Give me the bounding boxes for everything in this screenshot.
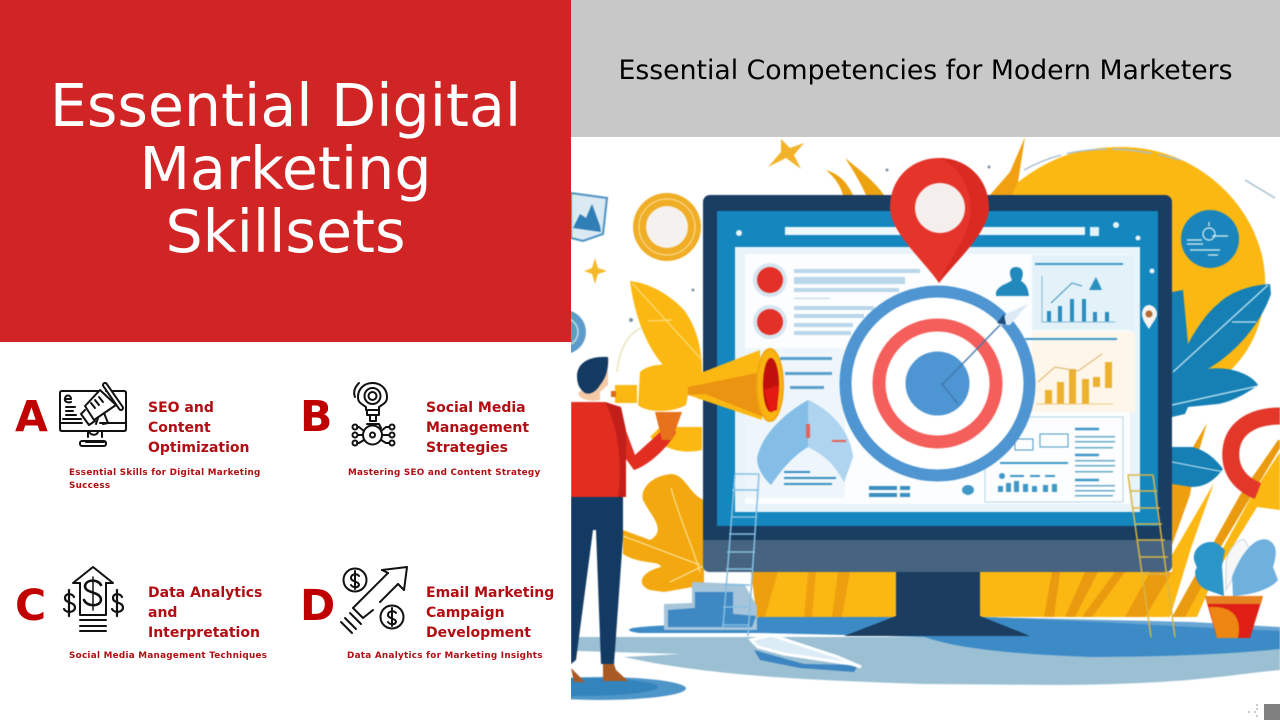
screen: lower dashboard panels bbox=[962, 417, 1123, 502]
screen: avatar and bar chart bbox=[996, 255, 1135, 330]
card C bbox=[15, 566, 267, 661]
screen: list with red bullets bbox=[745, 263, 920, 498]
icon: dollar house arrow bbox=[62, 566, 124, 632]
sprinkle of dots bbox=[629, 166, 990, 322]
caption A: Success bbox=[69, 481, 110, 491]
title: Marketing bbox=[139, 135, 432, 203]
title bbox=[50, 72, 521, 266]
decorative stars and badges bbox=[571, 138, 804, 354]
red ring arc bbox=[1231, 416, 1280, 510]
yellow leaf bbox=[617, 281, 702, 452]
letter A: A bbox=[15, 393, 48, 442]
corner grey square with dots bbox=[1248, 704, 1280, 720]
yellow base band bbox=[751, 423, 1280, 617]
card B bbox=[300, 382, 541, 478]
pencil bbox=[751, 635, 861, 672]
subtitle: Essential Competencies for Modern Marketers bbox=[619, 55, 1232, 86]
heading D bbox=[426, 585, 554, 641]
blue stairs bbox=[664, 582, 757, 630]
yellow sun backdrop bbox=[826, 137, 1275, 390]
card D bbox=[300, 566, 554, 661]
title: Essential Digital bbox=[50, 72, 521, 140]
icon: monitor with megaphone bbox=[59, 382, 127, 447]
potted plant bbox=[1194, 539, 1278, 638]
heading C: and bbox=[148, 605, 177, 621]
heading A: SEO and bbox=[148, 400, 214, 416]
person bbox=[571, 357, 676, 682]
ground bbox=[571, 617, 1280, 685]
blue ladder bbox=[722, 474, 759, 636]
heading C: Interpretation bbox=[148, 625, 260, 641]
caption C: Social Media Management Techniques bbox=[69, 651, 267, 661]
panel: title background bbox=[0, 0, 571, 342]
title: Skillsets bbox=[165, 198, 406, 266]
screen: pie shape and text bbox=[757, 400, 910, 497]
heading B: Management bbox=[426, 420, 529, 436]
heading B: Social Media bbox=[426, 400, 526, 416]
caption A bbox=[69, 468, 261, 491]
yellow ladder bbox=[1128, 475, 1175, 637]
megaphone bbox=[611, 349, 783, 440]
heading A: Content bbox=[148, 420, 211, 436]
panel: subtitle band bbox=[571, 0, 1280, 137]
caption D: Data Analytics for Marketing Insights bbox=[347, 651, 543, 661]
heading A: Optimization bbox=[148, 440, 249, 456]
heading B bbox=[426, 400, 529, 456]
shadow under person bbox=[571, 676, 687, 701]
orange leaf bbox=[623, 474, 704, 592]
icon: growth arrow with coins bbox=[340, 566, 408, 634]
heading A bbox=[148, 400, 249, 456]
caption A: Essential Skills for Digital Marketing bbox=[69, 468, 261, 478]
card A bbox=[15, 382, 261, 491]
target with arrow bbox=[846, 292, 1030, 476]
heading C: Data Analytics bbox=[148, 585, 262, 601]
small map pin and sun badge bbox=[1142, 210, 1239, 329]
screen: orange bar chart bbox=[1025, 332, 1135, 412]
illustration: marketer with megaphone and monitor bbox=[571, 137, 1280, 701]
letter B: B bbox=[300, 393, 332, 442]
blue leaves bbox=[1172, 284, 1271, 487]
heading D: Campaign bbox=[426, 605, 505, 621]
heading B: Strategies bbox=[426, 440, 508, 456]
location pin bbox=[890, 158, 989, 283]
heading C bbox=[148, 585, 262, 641]
icon: lightbulb with network bbox=[352, 382, 396, 446]
monitor bbox=[703, 195, 1172, 636]
letter D: D bbox=[300, 582, 335, 631]
heading D: Email Marketing bbox=[426, 585, 554, 601]
letter C: C bbox=[15, 582, 46, 631]
heading D: Development bbox=[426, 625, 531, 641]
caption B: Mastering SEO and Content Strategy bbox=[348, 468, 541, 478]
